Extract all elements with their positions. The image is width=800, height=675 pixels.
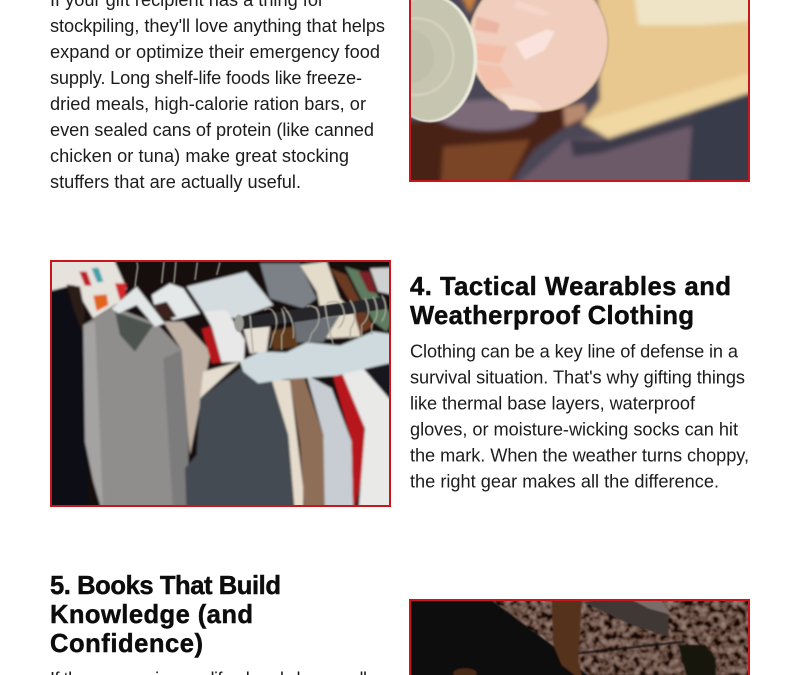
section 5 heading: Confidence) [50,630,203,658]
section 4 body text [410,342,749,492]
section 4 heading: 4. Tactical Wearables and [410,273,731,301]
rack rod [240,303,387,323]
section 4 body text: gloves, or moisture-wicking socks can hit [410,420,738,440]
section 3 body text: expand or optimize their emergency food [50,42,380,62]
section 3 body text: chicken or tuna) make great stocking [50,146,349,166]
section 5 heading: Knowledge (and [50,601,253,629]
right garments [193,362,240,455]
section 4 body text: the right gear makes all the difference. [410,472,719,492]
section 3 body text: stockpiling, they'll love anything that helps [50,16,385,36]
beige sweater [163,322,211,455]
photo: opened can of tuna [409,0,750,182]
hanger hooks [135,262,386,355]
upper-left garments [47,258,127,318]
section 4 body text: the mark. When the weather turns choppy, [410,446,749,466]
photo: clothing rack with sweaters [50,260,391,507]
section 3 body text: even sealed cans of protein (like canned [50,120,374,140]
red collar and white shirt [203,310,245,362]
back hangers [187,272,273,318]
section 3 body text: stuffers that are actually useful. [50,172,301,192]
section 4 heading [410,273,731,330]
section 4 body text: survival situation. That's why gifting things [410,368,745,388]
garments under the rod [243,327,270,353]
section 3 body text [50,0,385,192]
section 4 body text: Clothing can be a key line of defense in a [410,342,739,362]
section 5 heading [50,572,281,658]
section 5 heading: 5. Books That Build [50,572,281,600]
section 3 body text: supply. Long shelf-life foods like freeze- [50,68,362,88]
section 4 body text: like thermal base layers, waterproof [410,394,696,414]
section 4 heading: Weatherproof Clothing [410,302,694,330]
photo: survival scene on forest floor [409,599,750,675]
front hangers [240,332,393,383]
section 3 body text: dried meals, high-calorie ration bars, or [50,94,366,114]
sweater on the left [83,307,188,515]
